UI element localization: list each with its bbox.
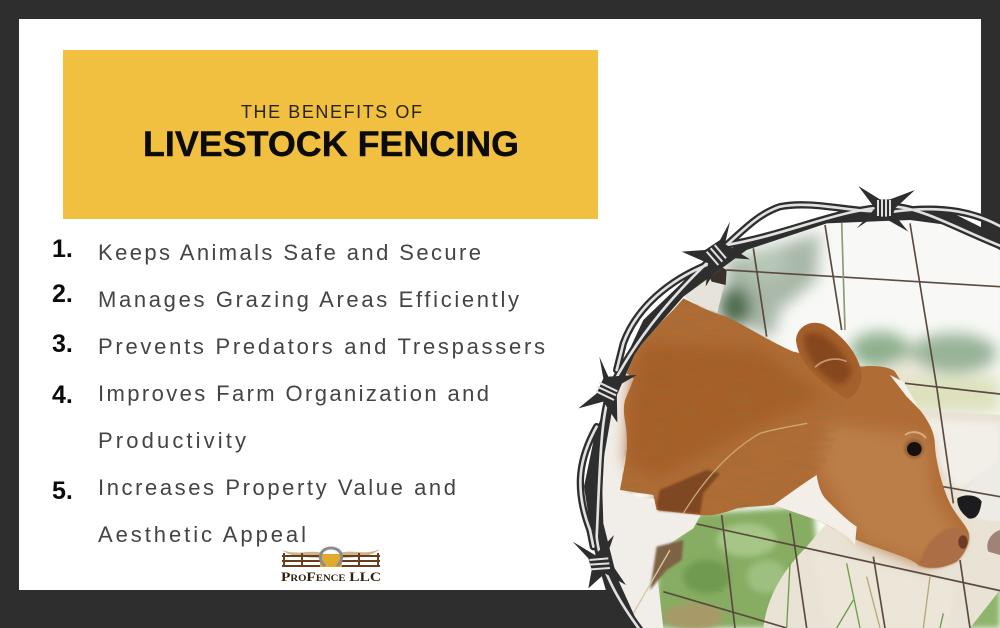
barb: lower left [573,535,626,588]
item 2: Manages Grazing Areas Efficiently [98,287,519,312]
coat shading [627,343,823,477]
calf photo inside barbed wire circle [573,186,1000,628]
item 4 [52,381,489,453]
item 5 [52,475,456,547]
logo: ProFence LLC: ProFence LLC [281,569,381,584]
item 4: Productivity [98,428,246,453]
barb: middle left [578,357,637,423]
fence wires behind the calf [727,222,1000,503]
white animals [763,410,1000,628]
calf white body [600,378,703,628]
neck shadow [657,470,720,514]
title banner [63,50,598,219]
item 1: 1. [52,235,73,263]
calf brown coat [620,298,969,568]
grass [653,507,823,628]
white blaze [890,375,920,410]
grass blades [633,550,943,628]
item 2: 2. [52,280,73,308]
barb: top [857,186,915,232]
wire strands [580,205,1000,628]
item 5: 5. [52,477,73,505]
fur texture [620,298,847,515]
numbered benefits list [52,235,545,547]
muzzle [918,528,969,568]
item 4: 4. [52,381,73,409]
fence wires in front [663,487,1000,628]
item 1: Keeps Animals Safe and Secure [98,240,481,265]
logo: ProFence LLC [281,548,381,584]
item 5: Increases Property Value and [98,475,456,500]
white neck patch [773,475,857,545]
dog muzzle [958,463,1000,522]
hay stalk [683,423,807,513]
eye [904,439,924,459]
barbed wire band [573,186,1000,628]
photo background [593,213,1000,628]
item 3: 3. [52,330,73,358]
title: the benefits of: THE BENEFITS OF [241,102,422,122]
ear [796,323,862,399]
item 3: Prevents Predators and Trespassers [98,334,545,359]
title: livestock fencing: LIVESTOCK FENCING [143,125,519,164]
fence post [683,278,724,315]
item 5: Aesthetic Appeal [98,522,306,547]
item 4: Improves Farm Organization and [98,381,489,406]
barb: upper left [682,222,750,287]
